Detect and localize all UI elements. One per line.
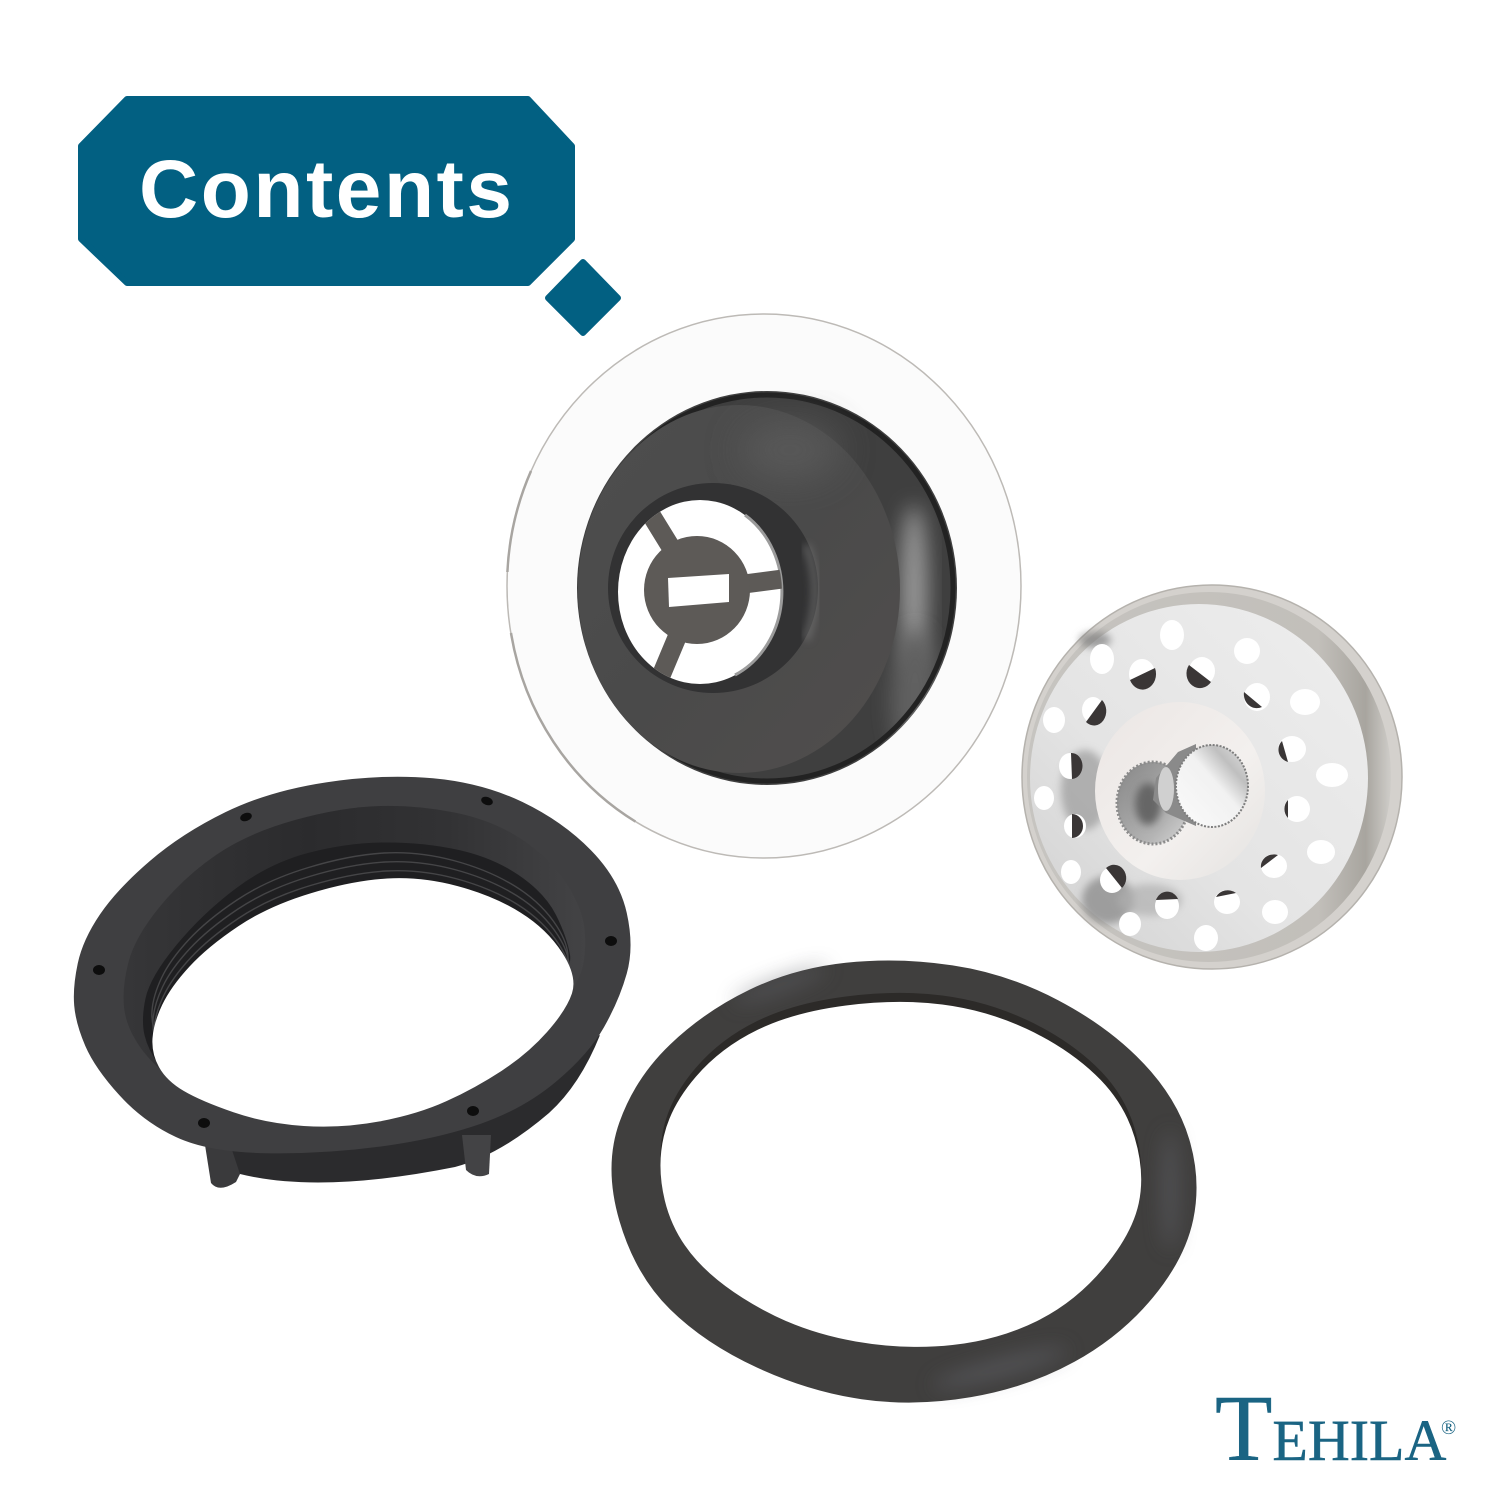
chrome flange xyxy=(507,314,1021,858)
cup opening xyxy=(577,391,957,785)
registered mark: ® xyxy=(1441,1417,1456,1439)
knob cap xyxy=(1176,745,1248,827)
spider arms xyxy=(648,510,790,678)
knob barrel xyxy=(1153,744,1196,826)
mounting holes xyxy=(93,795,617,1128)
mid wall tone xyxy=(891,630,939,770)
banner heading: Contents xyxy=(139,144,512,235)
nut rim xyxy=(74,777,631,1153)
cup step xyxy=(578,405,900,773)
center hub xyxy=(1095,702,1265,880)
basket rim xyxy=(1022,585,1402,969)
basket wall xyxy=(1027,592,1391,962)
drain hole rim xyxy=(735,515,782,675)
stem xyxy=(1135,783,1161,825)
collar highlight xyxy=(806,545,815,640)
bright wall reflection xyxy=(900,505,928,675)
nut collar xyxy=(124,806,585,1119)
drain flange with dark cup xyxy=(507,314,1021,858)
knurled washer xyxy=(1117,762,1189,844)
knob barrel highlight xyxy=(1158,767,1174,811)
disc reflections xyxy=(1061,632,1182,924)
outer thread stripes xyxy=(632,392,956,784)
nut foot left xyxy=(205,1145,240,1188)
step highlight xyxy=(740,420,840,480)
rubber gasket xyxy=(611,961,1197,1403)
banner diamond pointer xyxy=(548,262,618,333)
nut foot right xyxy=(462,1135,491,1176)
flange edge shading xyxy=(507,471,636,822)
dark see-through wedges xyxy=(1071,665,1288,900)
spider crossbar xyxy=(644,510,790,678)
spider slot xyxy=(668,574,729,607)
basket disc xyxy=(1030,604,1368,952)
nut threads xyxy=(143,842,570,1114)
brand wordmark: TEHILA xyxy=(1215,1377,1446,1481)
gasket inner dark lip xyxy=(660,993,1141,1338)
gasket sheen xyxy=(731,962,1177,1394)
perforation holes xyxy=(1034,620,1348,951)
threaded mounting nut xyxy=(74,777,631,1188)
spider hub xyxy=(644,536,750,644)
inner dark collar xyxy=(608,483,818,693)
nut center opening xyxy=(152,878,573,1127)
banner octagon xyxy=(81,99,572,283)
thread lines xyxy=(152,853,570,1058)
brand logo xyxy=(1215,1377,1456,1481)
strainer basket xyxy=(1022,585,1402,969)
drain hole xyxy=(618,500,782,684)
title banner xyxy=(81,99,618,333)
nut skirt xyxy=(205,1035,600,1183)
gasket body xyxy=(611,961,1197,1403)
cup wall highlights xyxy=(632,392,956,784)
gasket center opening xyxy=(660,1002,1141,1347)
